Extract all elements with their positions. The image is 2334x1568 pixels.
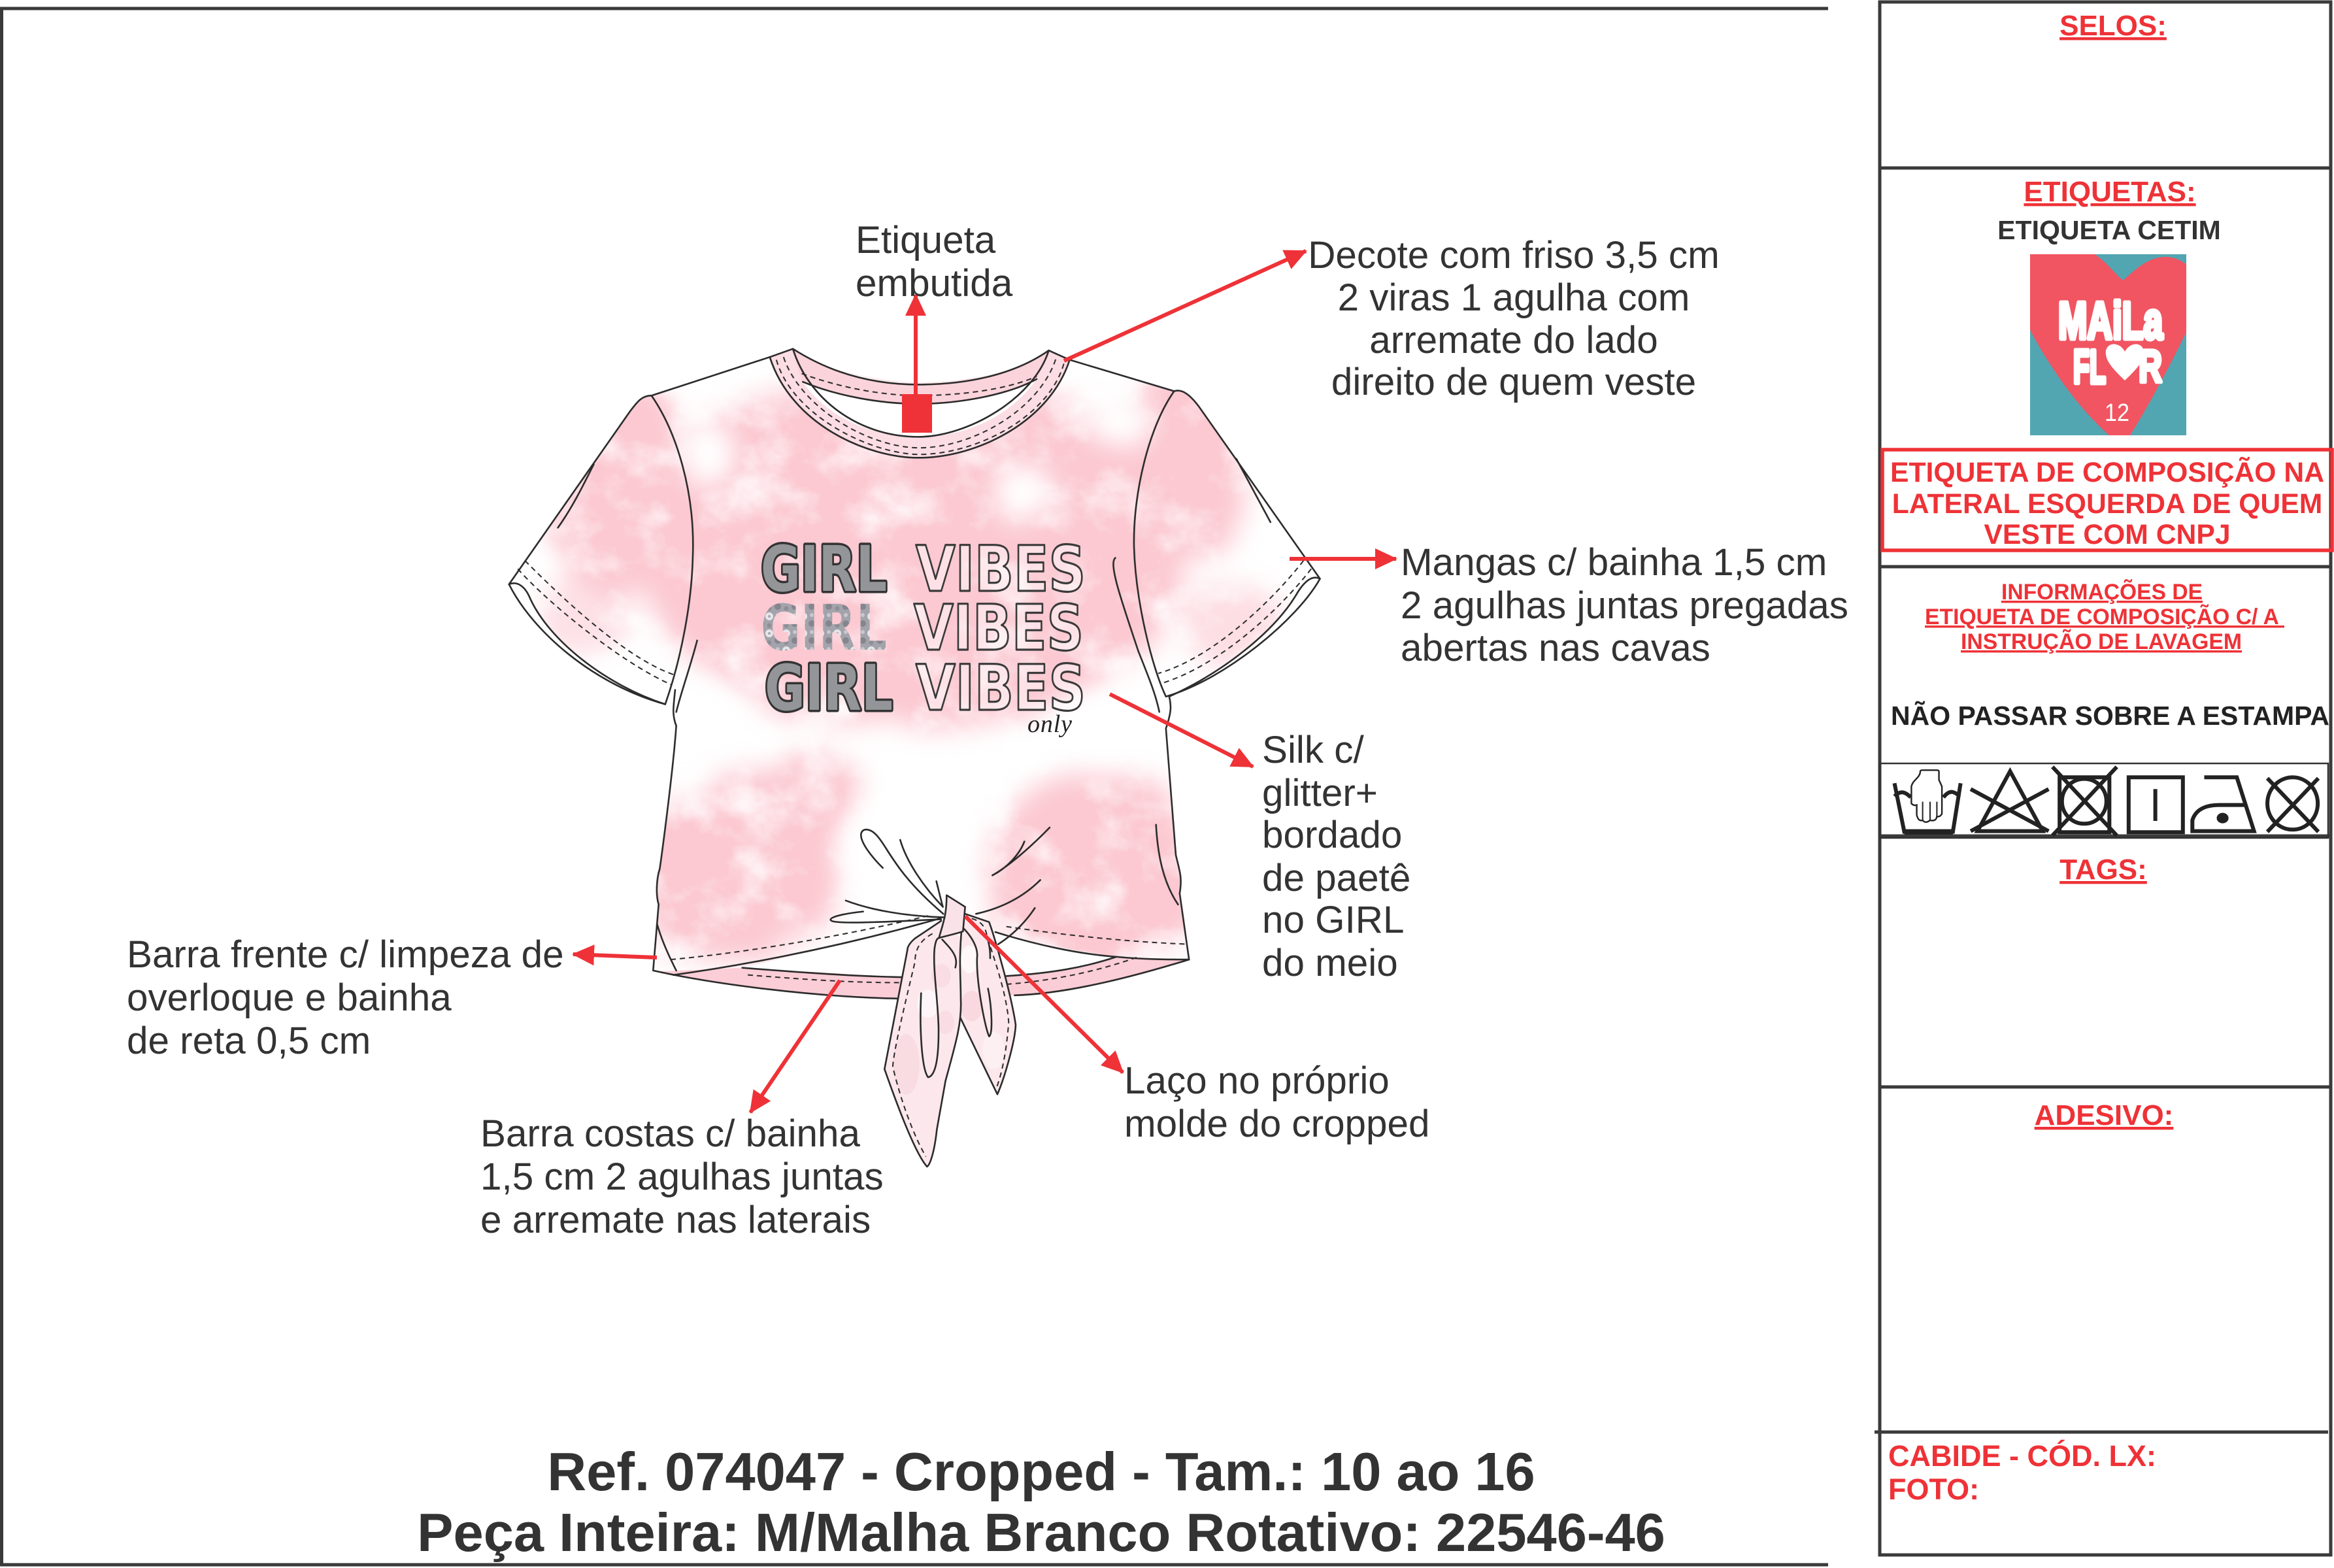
- logo: Maila Flor label: FL: [2073, 341, 2106, 393]
- label: barra frente: overloque e bainha: [127, 976, 452, 1019]
- knot: [939, 895, 965, 938]
- label: barra costas: Barra costas c/ bainha: [480, 1112, 860, 1155]
- sleeve openings: [509, 583, 665, 704]
- logo: Maila Flor label: MAiLa: [2058, 292, 2163, 350]
- icon: no tumble dry: [2052, 767, 2117, 835]
- arrow: barra frente: [573, 954, 657, 958]
- label: laco: molde do cropped: [1124, 1103, 1429, 1145]
- label: silk: Silk c/: [1262, 729, 1365, 771]
- care symbols strip: [1880, 763, 2328, 838]
- label: silk: do meio: [1262, 942, 1398, 984]
- panel: selos heading: SELOS:: [2059, 10, 2167, 42]
- warning text: NÃO PASSAR SOBRE A ESTAMPA: [1891, 701, 2329, 731]
- icon: line dry: [2129, 777, 2183, 832]
- logo: Maila Flor label: [2030, 254, 2186, 435]
- callout: etiqueta de composicao: LATERAL ESQUERDA DE QUEM: [1892, 488, 2322, 520]
- print: GIRL VIBES x3: VIBES: [914, 592, 1084, 665]
- informacoes heading: INFORMAÇÕES DE: [2001, 580, 2203, 605]
- callout: etiqueta de composicao: [1882, 450, 2332, 550]
- panel: adesivo heading: ADESIVO:: [2035, 1099, 2173, 1131]
- label: silk: bordado: [1262, 814, 1402, 856]
- logo: Maila Flor label: 12: [2105, 399, 2129, 427]
- label: mangas: abertas nas cavas: [1401, 627, 1710, 669]
- arrow: silk: [1110, 694, 1253, 767]
- back hem rib: [654, 957, 1189, 999]
- label: silk: glitter+: [1262, 772, 1378, 814]
- row 3: GIRL: [765, 652, 893, 725]
- garment: tie-dye cropped t-shirt: [484, 327, 1346, 1167]
- title: Peça Inteira: M/Malha Branco Rotativo: 22546-46: [417, 1502, 1665, 1563]
- icon: hand wash: [1895, 770, 1961, 832]
- icon: no bleach: [1971, 771, 2048, 831]
- panel: cabide e foto: CABIDE - CÓD. LX:: [1888, 1439, 2156, 1473]
- tumble circle: [2062, 779, 2107, 824]
- label: mangas: Mangas c/ bainha 1,5 cm: [1401, 541, 1827, 584]
- informacoes heading: ETIQUETA DE COMPOSIÇÃO C/ A: [1925, 605, 2284, 629]
- label: barra costas: 1,5 cm 2 agulhas juntas: [480, 1156, 884, 1198]
- tie knot with two tails: [831, 827, 1050, 1167]
- radiating folds: [831, 827, 1050, 944]
- red neck label patch: [902, 394, 932, 433]
- label: silk: de paetê: [1262, 857, 1410, 899]
- label: laco: Laço no próprio: [1124, 1059, 1390, 1102]
- label: silk: no GIRL: [1262, 899, 1404, 941]
- callout: etiqueta de composicao: VESTE COM CNPJ: [1984, 519, 2231, 550]
- hem gap right: [990, 932, 1116, 976]
- arrow: mangas: [1290, 557, 1396, 561]
- etiqueta cetim: ETIQUETA CETIM: [1997, 215, 2221, 245]
- arrow: laco: [965, 916, 1123, 1073]
- label: decote: Decote com friso 3,5 cm: [1308, 234, 1720, 276]
- label: barra frente: de reta 0,5 cm: [127, 1020, 371, 1062]
- panel: informacoes de etiqueta: [1880, 580, 2329, 838]
- row 2 sequin: GIRL: [761, 592, 887, 665]
- arrow: barra costas: [750, 980, 840, 1112]
- shirt outlines and stitching: [509, 349, 1320, 999]
- informacoes heading: INSTRUÇÃO DE LAVAGEM: [1961, 629, 2242, 654]
- shirt body with tie-dye fill: [508, 348, 1322, 1000]
- page frame: [1, 8, 1828, 1565]
- tail pink shading: [893, 964, 982, 1095]
- panel: cabide e foto: FOTO:: [1888, 1473, 1979, 1506]
- row 1: GIRL: [761, 533, 887, 606]
- right column frame: [1875, 2, 2332, 1555]
- title: Ref. 074047 - Cropped - Tam.: 10 ao 16: [547, 1441, 1535, 1502]
- label: etiqueta embutida: embutida: [856, 262, 1013, 305]
- etiquetas heading: ETIQUETAS:: [2024, 176, 2196, 208]
- print: GIRL VIBES x3: VIBES: [916, 533, 1086, 606]
- label: mangas: 2 agulhas juntas pregadas: [1401, 584, 1848, 627]
- logo: Maila Flor label: R: [2139, 341, 2162, 392]
- print: GIRL VIBES x3: VIBES: [916, 652, 1086, 725]
- right tail: [960, 914, 1016, 1094]
- hem gap left: [742, 937, 918, 977]
- left tail: [884, 921, 962, 1167]
- icon: iron low: [2192, 777, 2254, 831]
- collar and back rib tint: [770, 349, 1070, 458]
- label: barra frente: Barra frente c/ limpeza de: [127, 933, 564, 976]
- label: etiqueta embutida: Etiqueta: [856, 219, 996, 261]
- neck opening: [803, 379, 1037, 437]
- label: decote: arremate do lado: [1369, 319, 1658, 361]
- panel: tags heading: TAGS:: [2059, 854, 2147, 886]
- fine mottling: [552, 382, 1260, 959]
- label: barra costas: e arremate nas laterais: [480, 1199, 871, 1241]
- only: only: [1027, 710, 1072, 738]
- arrow: decote: [1064, 251, 1306, 361]
- label: decote: 2 viras 1 agulha com: [1338, 276, 1690, 319]
- panel: etiquetas: [1882, 176, 2332, 550]
- print: GIRL VIBES x3: [761, 533, 1086, 738]
- callout: etiqueta de composicao: ETIQUETA DE COMPOSIÇÃO NA: [1890, 457, 2324, 488]
- label: decote: direito de quem veste: [1331, 361, 1696, 403]
- icon: no dry clean: [2267, 777, 2318, 832]
- arrow: etiqueta: [914, 295, 918, 396]
